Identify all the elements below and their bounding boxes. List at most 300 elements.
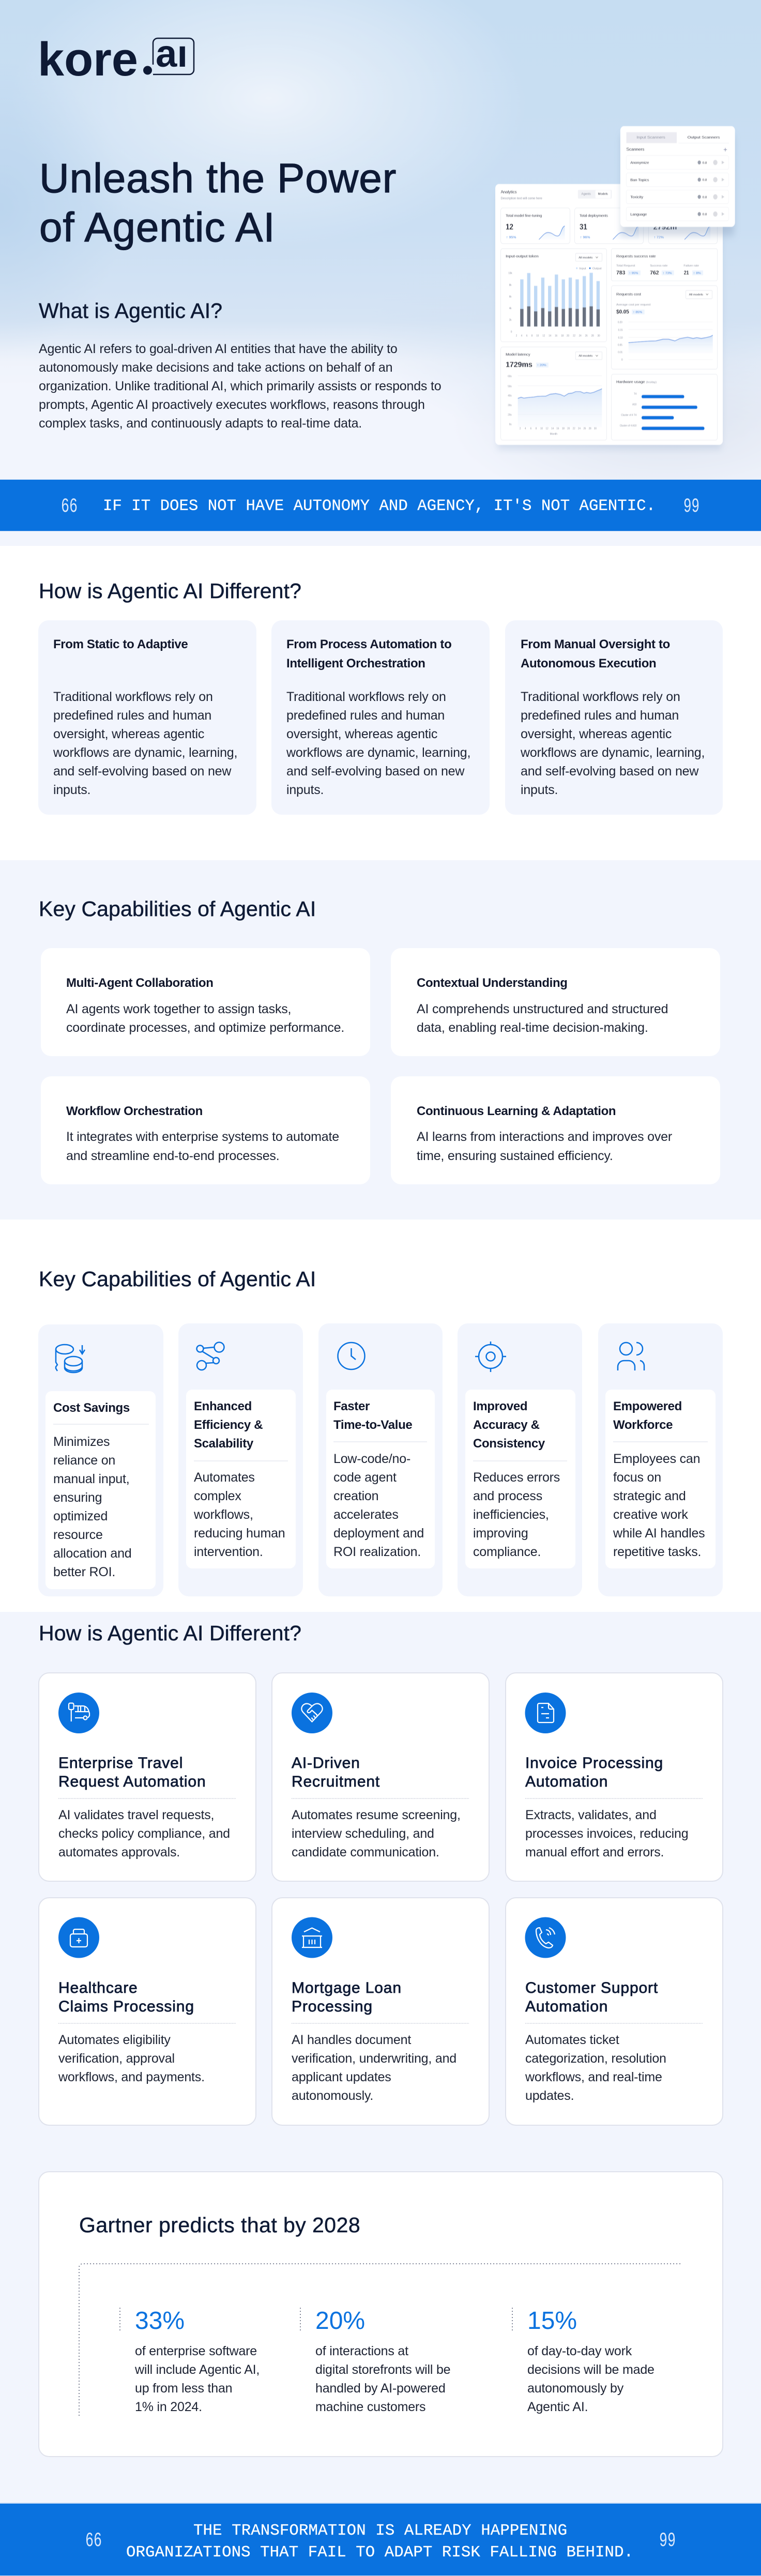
card: enterprise travel: automates approvals. (58, 1845, 180, 1859)
scanner row: ban topics (626, 173, 728, 187)
card: improved accuracy (458, 1323, 582, 1596)
chart: model latency: 20s (508, 413, 512, 417)
quote banner: transformation: 99 (659, 2529, 676, 2552)
stat card: 2792m: 2792m (653, 223, 677, 232)
card: from static to adaptive: oversight, whereas agentic (53, 727, 204, 741)
card: continuous learning: Continuous Learning & Adaptation (417, 1104, 616, 1118)
card: empowered workforce: repetitive tasks. (613, 1545, 701, 1559)
icon: medical briefcase (58, 1917, 99, 1958)
card: invoice processing: Extracts, validates, and (525, 1808, 657, 1822)
card: improved accuracy: Accuracy & (473, 1418, 540, 1432)
chart: hardware usage: Hardware usage (616, 380, 645, 384)
stat: 20 percent: machine customers (315, 2400, 425, 2414)
heading: what is agentic ai: What is Agentic AI? (39, 299, 222, 323)
stat: 20 percent: of interactions at (315, 2344, 408, 2358)
scanner row: language: 0.8 (703, 212, 707, 217)
stat: 33 percent (120, 2307, 260, 2414)
intro paragraph: Agentic AI refers to goal-driven AI entities that have the ability to (39, 342, 398, 356)
card: continuous learning: time, ensuring sustained efficiency. (417, 1149, 613, 1163)
chart: hardware usage: T4 (634, 392, 636, 396)
scanner row: ban topics: 0.8 (703, 178, 707, 182)
card: customer support: Automation (525, 1998, 608, 2015)
chart: input-output token bars: Output (592, 267, 602, 270)
chart: input-output token bars: 0 (511, 330, 512, 334)
analytics panel: Description text will come here (501, 197, 542, 201)
card: enhanced efficiency: Efficiency & (194, 1418, 263, 1432)
logo: kore.ai: aı (156, 32, 188, 75)
card: ai-driven recruitment: Recruitment (292, 1773, 380, 1790)
chart: requests cost: All models (689, 293, 703, 297)
chart: requests cost: 0.05 (618, 344, 622, 347)
card: enhanced efficiency: Automates (194, 1470, 255, 1485)
card: from manual oversight (505, 620, 723, 815)
card: enterprise travel (39, 1673, 256, 1881)
card: enterprise travel: checks policy compliance, and (58, 1826, 230, 1841)
quote banner: transformation (0, 2503, 761, 2576)
card: empowered workforce: Empowered (613, 1399, 682, 1413)
card: invoice processing: processes invoices, reducing (525, 1826, 688, 1841)
card: faster time to value: Faster (333, 1399, 370, 1413)
chart: model latency: 4 (525, 427, 526, 431)
chart: model latency: 24 (578, 427, 581, 431)
card: customer support: updates. (525, 2089, 574, 2103)
quote banner: transformation: ORGANIZATIONS THAT FAIL TO ADAPT RISK FALLING BEHIND. (126, 2543, 633, 2562)
panel: requests success rate: 762 (650, 270, 659, 276)
panel: scanners: Scanners (626, 147, 645, 152)
chart: input-output token bars: 28 (591, 334, 594, 338)
card: from manual oversight: predefined rules and human (521, 708, 679, 723)
chart: model latency: 14 (551, 427, 554, 431)
chart: model latency: 20 (567, 427, 570, 431)
card: ai-driven recruitment (272, 1673, 489, 1881)
analytics panel: Models (598, 193, 608, 196)
panel: requests success rate: 783 (616, 270, 626, 276)
chart: input-output token bars: 18 (561, 334, 564, 338)
chart: model latency: 1729ms (506, 360, 532, 369)
card: from process automation: From Process Automation to (286, 637, 451, 651)
card: invoice processing: Invoice Processing (525, 1755, 663, 1772)
stat card: 2792m (648, 208, 718, 243)
card: from static to adaptive: predefined rules and human (53, 708, 211, 723)
card: invoice processing (506, 1673, 723, 1881)
card: empowered workforce: Workforce (613, 1418, 673, 1432)
stat: 33 percent: 1% in 2024. (135, 2400, 202, 2414)
scanner row: anonymize: 0.8 (703, 161, 707, 165)
card: from process automation: Intelligent Orchestration (286, 657, 425, 670)
heading: gartner: Gartner predicts that by 2028 (79, 2213, 360, 2237)
chart: model latency (501, 347, 606, 440)
chart: input-output token bars: 16 (555, 334, 557, 338)
card: cost savings: resource (53, 1528, 103, 1542)
quote banner: autonomy (0, 479, 761, 531)
card: empowered workforce: creative work (613, 1507, 688, 1522)
chart: requests cost: 0.01 (618, 351, 622, 354)
card: cost savings (38, 1324, 163, 1596)
chart: hardware usage: Cluster of 4 T4 (621, 414, 636, 417)
chart: requests cost: ↑ 85% (633, 311, 642, 314)
chart: requests cost: 0.20 (618, 321, 622, 324)
chart: model latency: All models (579, 355, 593, 358)
card: from manual oversight: inputs. (521, 783, 558, 797)
card: ai-driven recruitment: AI-Driven (292, 1755, 360, 1772)
icon: heart handshake (292, 1693, 332, 1733)
quote banner: transformation: 66 (85, 2529, 102, 2552)
card: from process automation: and self-evolving based on new (286, 764, 465, 779)
chart: model latency: 16 (556, 427, 559, 431)
card: from manual oversight: workflows are dynamic, learning, (520, 745, 705, 760)
chart: input-output token bars: All models (579, 256, 593, 260)
card: cost savings: reliance on (53, 1453, 115, 1468)
chart: model latency: ↑ 20% (537, 364, 546, 367)
stat: 20 percent: digital storefronts will be (315, 2362, 450, 2377)
logo: kore.ai: kore (38, 33, 138, 86)
heading: key capabilities: Key Capabilities of Agentic AI (39, 897, 316, 921)
analytics panel: Agents (582, 193, 591, 196)
intro paragraph: organization. Unlike traditional AI, which primarily assists or responds to (39, 379, 441, 393)
card: multi-agent collaboration: Multi-Agent Collaboration (66, 976, 214, 990)
section background: how different (0, 546, 761, 860)
icon: bank (292, 1917, 332, 1958)
chart: requests cost: 0.15 (618, 329, 623, 332)
card: improved accuracy: Reduces errors (473, 1470, 560, 1485)
panel: gartner predictions (39, 2172, 723, 2457)
card: contextual understanding (391, 948, 720, 1056)
stat: 15 percent: of day-to-day work (527, 2344, 632, 2358)
chart: model latency: 12 (546, 427, 549, 431)
card: from static to adaptive: Traditional workflows rely on (53, 690, 213, 704)
card: healthcare claims: workflows, and payments. (58, 2070, 205, 2084)
card: empowered workforce: focus on (613, 1470, 661, 1485)
chart: input-output token bars: Input (580, 267, 586, 270)
card: from static to adaptive: workflows are dynamic, learning, (53, 745, 237, 760)
card: improved accuracy: Improved (473, 1399, 527, 1413)
stat card: total model fine-tuning: 12 (506, 223, 513, 232)
card: faster time to value: deployment and (333, 1526, 424, 1541)
analytics panel (495, 184, 723, 445)
panel: scanners: Input Scanners (636, 136, 665, 140)
chart: input-output token bars: Input-output token (506, 254, 539, 258)
card: from static to adaptive (38, 620, 256, 815)
stat: 15 percent: autonomously by (527, 2381, 624, 2396)
heading: use cases: How is Agentic AI Different? (39, 1621, 301, 1645)
card: mortgage loan: verification, underwriting, and (292, 2051, 456, 2066)
icon: target (475, 1342, 506, 1372)
card: mortgage loan (272, 1898, 489, 2125)
card: cost savings: optimized (53, 1509, 108, 1523)
card: continuous learning (391, 1076, 720, 1184)
card: cost savings: manual input, (53, 1472, 129, 1486)
stat: 20 percent: handled by AI-powered (315, 2381, 446, 2396)
panel: requests success rate: ↑ 95% (629, 271, 638, 275)
card: enhanced efficiency: Enhanced (194, 1399, 252, 1413)
card: workflow orchestration: Workflow Orchestration (66, 1104, 203, 1118)
chart: model latency: 6 (530, 427, 531, 431)
card: mortgage loan: AI handles document (292, 2033, 411, 2047)
card: enhanced efficiency: workflows, (193, 1507, 253, 1522)
analytics panel: Analytics (501, 189, 517, 194)
card: healthcare claims: Claims Processing (58, 1998, 194, 2015)
card: improved accuracy: and process (473, 1489, 542, 1503)
icon: nodes (196, 1342, 224, 1370)
chart: input-output token bars: 24 (579, 334, 582, 338)
panel: requests success rate: Total Request (616, 264, 635, 268)
chart: input-output token bars: 6 (526, 334, 528, 338)
card: mortgage loan: autonomously. (292, 2089, 373, 2103)
card: improved accuracy: inefficiencies, (473, 1507, 549, 1522)
chart: input-output token bars: 10k (508, 271, 512, 275)
chart: hardware usage: A10 (632, 403, 636, 406)
panel: requests success rate: ↑ 8% (693, 271, 701, 275)
chart: input-output token bars: 20 (567, 334, 569, 338)
chart: input-output token bars: 8k (509, 284, 512, 287)
card: multi-agent collaboration (41, 948, 370, 1056)
chart: input-output token bars: 12 (542, 334, 545, 338)
card: enhanced efficiency: intervention. (194, 1545, 263, 1559)
panel: scanners (620, 126, 735, 227)
chart: input-output token bars: 14 (549, 334, 551, 338)
chart: hardware usage: (hrs/day) (646, 381, 657, 384)
chart: requests cost: $0.05 (616, 309, 629, 315)
card: empowered workforce: while AI handles (613, 1526, 705, 1541)
scanner row: language: Language (630, 213, 647, 217)
logo: kore.ai (38, 32, 194, 86)
section background: use cases (0, 1612, 761, 2503)
card: mortgage loan: Processing (292, 1998, 373, 2015)
card: empowered workforce (598, 1323, 723, 1596)
chart: input-output token bars: 26 (585, 334, 588, 338)
chart: model latency: Month (550, 433, 557, 436)
stat: 33 percent: up from less than (135, 2381, 232, 2396)
stat: 15 percent: 15% (527, 2307, 577, 2335)
chart: model latency: Model latency (506, 353, 530, 357)
stat card: total deployments: Total deployments (580, 214, 608, 218)
card: customer support: workflows, and real-time (525, 2070, 662, 2084)
stat card: total deployments (575, 208, 644, 243)
chart: input-output token bars: 4k (509, 307, 512, 310)
chart: input-output token bars: 10 (536, 334, 539, 338)
card: from manual oversight: Traditional workflows rely on (521, 690, 680, 704)
scanner row: language (626, 207, 728, 221)
card: cost savings: allocation and (53, 1546, 131, 1561)
card: ai-driven recruitment: candidate communication. (292, 1845, 439, 1859)
heading: how is agentic ai different: How is Agentic AI Different? (39, 579, 301, 603)
chart: model latency: 0s (509, 423, 512, 426)
card: from process automation: predefined rules and human (286, 708, 445, 723)
card: enhanced efficiency (178, 1323, 303, 1596)
hero background (0, 0, 761, 546)
card: mortgage loan: applicant updates (292, 2070, 391, 2084)
icon: people (618, 1343, 644, 1370)
card: workflow orchestration: It integrates with enterprise systems to automate (66, 1130, 339, 1144)
card: improved accuracy: Consistency (473, 1437, 545, 1451)
chart: model latency: 26 (583, 427, 586, 431)
card: enhanced efficiency: reducing human (194, 1526, 285, 1541)
icon: document (525, 1693, 566, 1733)
quote banner: autonomy: 66 (61, 495, 78, 518)
heading: key capabilities benefits: Key Capabilities of Agentic AI (39, 1267, 316, 1291)
card: cost savings: Cost Savings (53, 1401, 130, 1415)
intro paragraph: complex tasks, and continuously adapts to real-time data. (39, 416, 362, 431)
card: contextual understanding: Contextual Understanding (417, 976, 568, 990)
panel: requests success rate: ↑ 73% (663, 271, 672, 275)
chart: model latency: 30 (594, 427, 597, 431)
card: healthcare claims (39, 1898, 256, 2125)
card: improved accuracy: compliance. (473, 1545, 541, 1559)
chart: input-output token bars: 4 (521, 334, 522, 338)
stat card: total model fine-tuning: Total model fine-tuning (506, 214, 542, 218)
stat: 15 percent: Agentic AI. (527, 2400, 588, 2414)
stat: 33 percent: of enterprise software (135, 2344, 257, 2358)
card: contextual understanding: AI comprehends unstructured and structured (417, 1002, 668, 1016)
stat: 33 percent: 33% (135, 2307, 185, 2335)
quote banner: transformation: THE TRANSFORMATION IS ALREADY HAPPENING (193, 2522, 567, 2540)
card: workflow orchestration (41, 1076, 370, 1184)
intro paragraph: prompts, Agentic AI proactively executes workflows, reasons through (39, 398, 425, 412)
panel: requests success rate: Success rate (650, 264, 667, 268)
icon: clock (338, 1343, 365, 1369)
card: from manual oversight: oversight, whereas agentic (521, 727, 672, 741)
card: ai-driven recruitment: interview scheduling, and (292, 1826, 434, 1841)
chart: input-output token bars: 2 (516, 334, 518, 338)
chart: requests cost (612, 286, 718, 369)
card: cost savings: Minimizes (53, 1435, 110, 1449)
dashboard mockup (495, 126, 736, 451)
card: from process automation: inputs. (286, 783, 324, 797)
card: multi-agent collaboration: coordinate processes, and optimize performance. (66, 1020, 344, 1035)
chart: model latency: 50s (508, 385, 512, 388)
stat: 20 percent (300, 2307, 450, 2414)
card: from static to adaptive: inputs. (53, 783, 90, 797)
stat card: 2792m: ↑ 72% (654, 235, 664, 239)
chart: model latency: 30s (508, 404, 512, 407)
card: from manual oversight: and self-evolving based on new (521, 764, 699, 779)
card: customer support: Automates ticket (525, 2033, 619, 2047)
title (39, 155, 397, 250)
chart: hardware usage (612, 374, 718, 440)
card: empowered workforce: strategic and (613, 1489, 686, 1503)
card: customer support: categorization, resolution (525, 2051, 666, 2066)
card: from manual oversight: Autonomous Execution (521, 657, 656, 670)
card: ai-driven recruitment: Automates resume screening, (292, 1808, 461, 1822)
stat: 15 percent (512, 2307, 655, 2414)
stat: 20 percent: 20% (315, 2307, 365, 2335)
chart: model latency: 18 (562, 427, 565, 431)
card: from process automation: Traditional workflows rely on (286, 690, 446, 704)
card: healthcare claims: Automates eligibility (58, 2033, 171, 2047)
title: of Agentic AI (39, 204, 275, 250)
card: customer support: Customer Support (525, 1979, 658, 1996)
chart: input-output token bars: 2k (509, 318, 512, 322)
card: contextual understanding: data, enabling real-time decision-making. (417, 1020, 648, 1035)
card: improved accuracy: improving (473, 1526, 528, 1541)
stat card: total deployments: 31 (580, 223, 587, 232)
chart: model latency: 10 (540, 427, 543, 431)
card: faster time to value: creation (333, 1489, 378, 1503)
card: multi-agent collaboration: AI agents work together to assign tasks, (66, 1002, 291, 1016)
stat card: total model fine-tuning (501, 208, 570, 243)
scanner row: toxicity (626, 190, 728, 204)
card: cost savings: ensuring (53, 1490, 102, 1505)
card: empowered workforce: Employees can (613, 1452, 700, 1466)
scanner row: toxicity: 0.8 (703, 195, 707, 199)
icon: phone (525, 1917, 566, 1958)
chart: requests cost: 0 (621, 358, 623, 362)
card: from process automation: workflows are dynamic, learning, (286, 745, 470, 760)
quote banner: autonomy: IF IT DOES NOT HAVE AUTONOMY AND AGENCY, IT'S NOT AGENTIC. (103, 497, 656, 515)
stat: 33 percent: will include Agentic AI, (134, 2362, 260, 2377)
card: workflow orchestration: and streamline end-to-end processes. (66, 1149, 279, 1163)
chart: model latency: 8 (536, 427, 537, 431)
chart: model latency: 22 (573, 427, 575, 431)
card: mortgage loan: Mortgage Loan (292, 1979, 402, 1996)
chart: model latency: 2 (520, 427, 521, 431)
card: from process automation: oversight, whereas agentic (286, 727, 437, 741)
panel: requests success rate: Failure rate (683, 264, 699, 268)
panel: requests success rate (612, 249, 718, 281)
scanner row: ban topics: Ban Topics (630, 178, 649, 182)
chart: model latency: 28 (589, 427, 591, 431)
chart: input-output token bars: 6k (509, 295, 512, 299)
intro paragraph (39, 342, 441, 431)
card: faster time to value: ROI realization. (333, 1545, 421, 1559)
scanner row: toxicity: Toxicity (630, 195, 644, 200)
stat card: total model fine-tuning: ↑ 95% (506, 235, 516, 239)
stat: 15 percent: decisions will be made (527, 2362, 655, 2377)
card: from static to adaptive: and self-evolving based on new (53, 764, 232, 779)
scanner row: anonymize: Anonymize (630, 161, 649, 165)
card: faster time to value: Low-code/no- (333, 1452, 410, 1466)
panel: requests success rate: 21 (684, 270, 689, 276)
chart: requests cost: 0.10 (618, 336, 623, 340)
intro paragraph: autonomously make decisions and take actions on behalf of an (39, 360, 392, 375)
quote banner: autonomy: 99 (683, 495, 699, 518)
card: faster time to value: accelerates (333, 1507, 399, 1522)
card: enhanced efficiency: complex (194, 1489, 241, 1503)
card: enterprise travel: Request Automation (58, 1773, 206, 1790)
card: healthcare claims: verification, approval (58, 2051, 175, 2066)
section background: key capabilities (0, 860, 761, 1220)
card: from manual oversight: From Manual Oversight to (521, 637, 670, 651)
card: enhanced efficiency: Scalability (194, 1437, 254, 1451)
chart: input-output token bars: 30 (598, 334, 600, 338)
card: healthcare claims: Healthcare (58, 1979, 138, 1996)
stat card: total deployments: ↑ 96% (580, 235, 590, 239)
card: enterprise travel: Enterprise Travel (58, 1755, 183, 1772)
chart: requests cost: Average cost per request (616, 303, 651, 307)
card: faster time to value (318, 1323, 443, 1596)
scanner row: anonymize (626, 156, 728, 170)
card: from process automation (271, 620, 490, 815)
chart: input-output token bars: 8 (531, 334, 532, 338)
card: faster time to value: Time-to-Value (333, 1418, 412, 1432)
icon: bus (58, 1693, 99, 1733)
icon: databases (56, 1345, 85, 1373)
card: customer support (506, 1898, 723, 2125)
card: cost savings: better ROI. (53, 1565, 115, 1579)
card: invoice processing: manual effort and errors. (525, 1845, 664, 1859)
card: faster time to value: code agent (333, 1470, 397, 1485)
chart: model latency: 40s (508, 394, 512, 398)
card: continuous learning: AI learns from interactions and improves over (417, 1130, 672, 1144)
chart: model latency: 60s (508, 375, 512, 378)
card: enterprise travel: AI validates travel requests, (58, 1808, 214, 1822)
title: Unleash the Power (39, 155, 397, 201)
chart: requests cost: Requests cost (616, 293, 641, 297)
chart: input-output token bars: 22 (573, 334, 575, 338)
chart: hardware usage: Cluster of 4 A10 (620, 424, 636, 428)
panel: scanners: Output Scanners (688, 136, 720, 140)
card: invoice processing: Automation (525, 1773, 608, 1790)
